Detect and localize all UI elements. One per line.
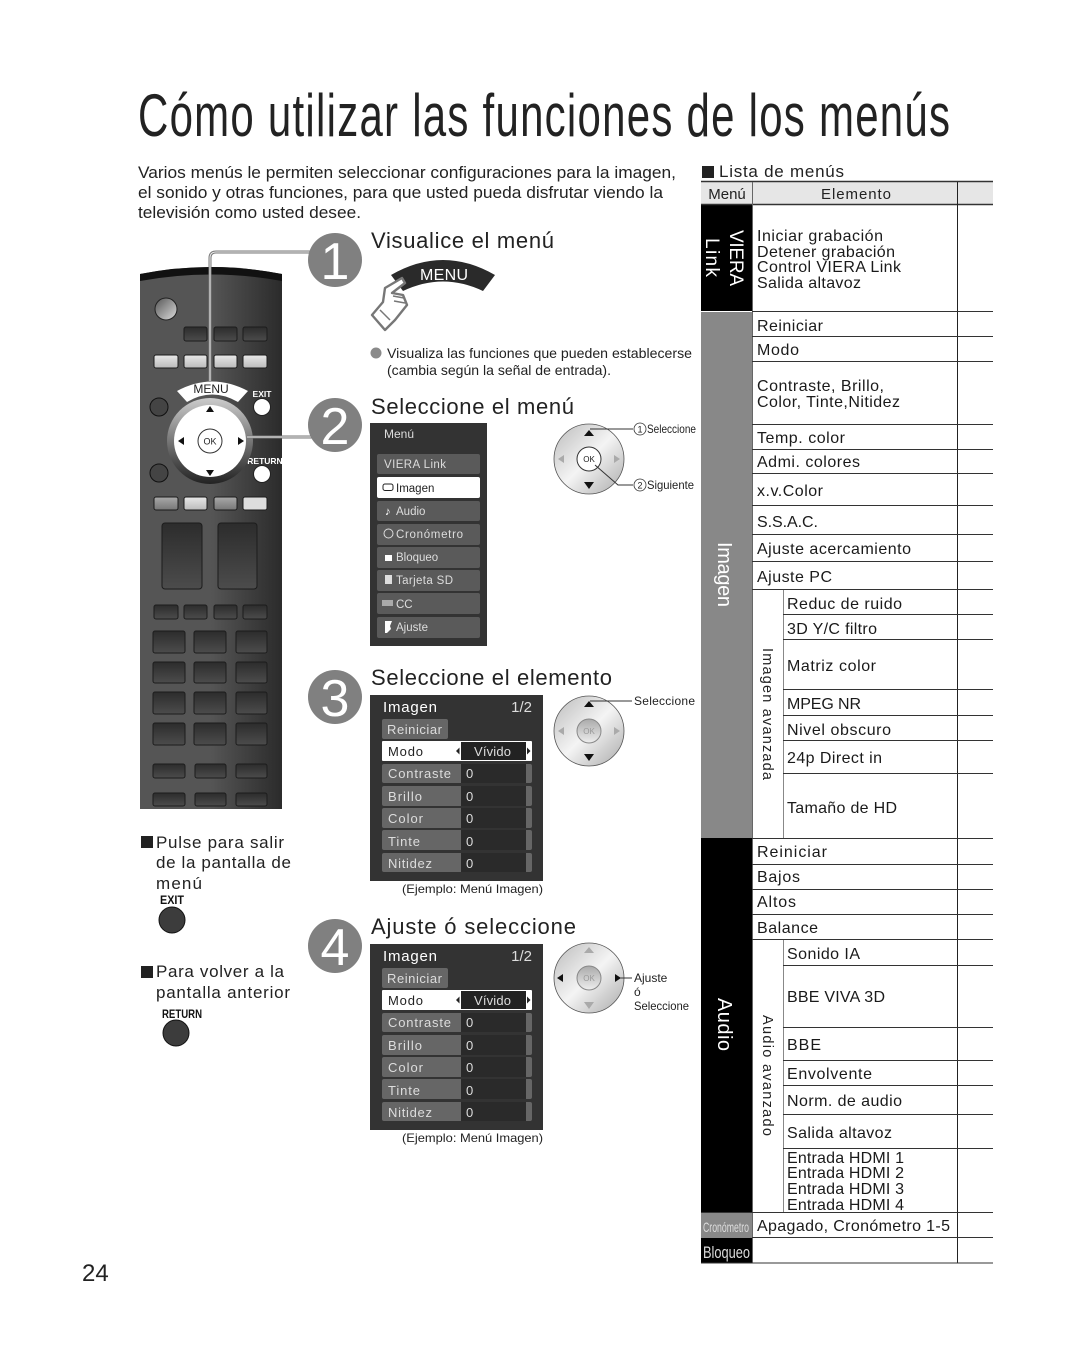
category: VIERA Link	[701, 230, 746, 286]
table items: Tamaño de HD	[787, 800, 897, 817]
table items: BBE	[787, 1037, 821, 1054]
dial step 3	[554, 694, 695, 766]
table items: Color, Tinte,Nitidez	[757, 394, 900, 411]
menu panel: Tarjeta SD	[396, 575, 453, 587]
image menu panel step 3: Brillo	[388, 789, 422, 804]
table items: Modo	[757, 342, 799, 359]
table items: Ajuste acercamiento	[757, 541, 911, 558]
image menu panel step 4: Modo	[388, 993, 423, 1008]
sub-category: Imagen avanzada: Imagen avanzada	[759, 648, 775, 781]
dial step 4: ó	[634, 985, 641, 999]
table items: Altos	[757, 894, 796, 911]
category: VIERA Link: VIERA	[725, 230, 746, 286]
table items: Contraste, Brillo,	[757, 378, 884, 395]
image menu panel step 4: Nitidez	[388, 1105, 432, 1120]
heading step 2: Seleccione el menú	[371, 394, 574, 419]
dial step 4: Ajuste	[634, 971, 668, 985]
image menu panel step 4: 0	[466, 1105, 473, 1120]
image menu panel step 4: Vívido	[474, 993, 511, 1008]
table heading: Lista de menús	[719, 162, 844, 181]
menu list table: Elemento	[821, 186, 891, 203]
menu panel: Bloqueo	[396, 552, 438, 564]
table items: Control VIERA Link	[757, 259, 902, 276]
image menu panel step 3	[370, 695, 543, 881]
image menu panel step 4: Imagen	[383, 948, 437, 965]
dial step 2: Seleccione	[647, 422, 696, 436]
step 1 note	[370, 345, 692, 378]
table items: Envolvente	[787, 1066, 872, 1083]
dial step 2: 2	[637, 480, 643, 490]
table items: Nivel obscuro	[787, 722, 891, 739]
intro text: el sonido y otras funciones, para que usted pueda disfrutar viendo la	[138, 184, 664, 202]
step 1 note: (cambia según la señal de entrada).	[387, 362, 611, 378]
table items: Entrada HDMI 4	[787, 1197, 904, 1214]
dial step 3: OK	[583, 727, 595, 736]
menu list table: Menú	[708, 186, 746, 203]
table items: Sonido IA	[787, 946, 860, 963]
image menu panel step 4: Reiniciar	[387, 971, 443, 986]
image menu panel step 3: 0	[466, 856, 473, 871]
intro text	[138, 164, 676, 222]
image menu panel step 4: Tinte	[388, 1083, 420, 1098]
category: Cronómetro: Cronómetro	[703, 1219, 749, 1235]
image menu panel step 3: 1/2	[511, 699, 532, 716]
table items: Norm. de audio	[787, 1093, 902, 1110]
table items: Matriz color	[787, 658, 877, 675]
remote control: OK	[203, 436, 217, 446]
intro text: Varios menús le permiten seleccionar configuraciones para la imagen,	[138, 164, 676, 182]
step number 1	[308, 233, 362, 291]
image menu panel step 3: 0	[466, 834, 473, 849]
image menu panel step 3: Vívido	[474, 744, 511, 759]
table items: Detener grabación	[757, 244, 895, 261]
return note	[141, 962, 290, 1046]
title: Cómo utilizar las funciones de los menús	[138, 82, 950, 149]
table items: Entrada HDMI 3	[787, 1181, 904, 1198]
table items: Iniciar grabación	[757, 228, 883, 245]
table items: Reiniciar	[757, 318, 824, 335]
table items: Balance	[757, 920, 818, 937]
remote control: RETURN	[247, 456, 283, 466]
heading step 1: Visualice el menú	[371, 228, 554, 253]
heading step 4: Ajuste ó seleccione	[371, 914, 576, 939]
menu panel	[370, 423, 487, 646]
step number 4	[308, 919, 362, 977]
menu panel: Menú	[384, 427, 414, 441]
menu panel: Cronómetro	[396, 529, 463, 541]
caption step 3: (Ejemplo: Menú Imagen)	[402, 882, 543, 896]
menu panel: Ajuste	[396, 622, 428, 634]
menu panel: VIERA Link	[384, 459, 446, 471]
exit note: Pulse para salir	[156, 833, 284, 852]
image menu panel step 4: Color	[388, 1060, 424, 1075]
menu button banner with hand	[372, 260, 495, 330]
category: VIERA Link: Link	[701, 238, 722, 278]
step number 3	[308, 670, 362, 728]
table items: BBE VIVA 3D	[787, 989, 885, 1006]
dial step 4: OK	[583, 974, 595, 983]
image menu panel step 3: Tinte	[388, 834, 420, 849]
table items: S.S.A.C.	[757, 514, 818, 531]
return note: RETURN	[162, 1007, 202, 1021]
table items: Bajos	[757, 869, 800, 886]
step number 3: 3	[321, 670, 349, 728]
table items: MPEG NR	[787, 696, 861, 713]
dial step 2: OK	[583, 455, 595, 464]
table items: Entrada HDMI 2	[787, 1165, 904, 1182]
dial step 4: Seleccione	[634, 999, 689, 1013]
image menu panel step 3: Imagen	[383, 699, 437, 716]
connector lines	[210, 252, 312, 437]
table items: Apagado, Cronómetro 1-5	[757, 1218, 950, 1235]
image menu panel step 4: Brillo	[388, 1038, 422, 1053]
page number: 24	[82, 1260, 109, 1287]
image menu panel step 3: Reiniciar	[387, 722, 443, 737]
table items: Admi. colores	[757, 454, 860, 471]
step number 2	[308, 398, 362, 456]
remote control	[140, 267, 283, 809]
step number 4: 4	[321, 919, 349, 977]
menu panel: CC	[396, 599, 413, 611]
image menu panel step 3: 0	[466, 811, 473, 826]
step number 2: 2	[321, 398, 349, 456]
exit note: menú	[156, 874, 202, 893]
table items: Ajuste PC	[757, 569, 832, 586]
table items: 3D Y/C filtro	[787, 621, 877, 638]
table items: Salida altavoz	[787, 1125, 892, 1142]
table items: Temp. color	[757, 430, 846, 447]
menu panel: Imagen	[396, 483, 434, 495]
step 1 note: Visualiza las funciones que pueden establecerse	[387, 345, 692, 361]
exit note: de la pantalla de	[156, 853, 291, 872]
image menu panel step 3: Modo	[388, 744, 423, 759]
remote control: EXIT	[253, 389, 272, 399]
step number 1: 1	[321, 233, 349, 291]
image menu panel step 4: Contraste	[388, 1015, 451, 1030]
heading step 3: Seleccione el elemento	[371, 665, 612, 690]
image menu panel step 3: 0	[466, 789, 473, 804]
table items: Entrada HDMI 1	[787, 1150, 904, 1167]
return note: Para volver a la	[156, 962, 285, 981]
exit note: EXIT	[160, 893, 185, 907]
image menu panel step 3: Contraste	[388, 766, 451, 781]
menu list table	[701, 162, 993, 1263]
image menu panel step 3: 0	[466, 766, 473, 781]
menu button banner with hand: MENU	[420, 267, 468, 284]
dial step 2	[554, 422, 696, 494]
image menu panel step 3: Nitidez	[388, 856, 432, 871]
intro text: televisión como usted desee.	[138, 204, 361, 222]
remote control: MENU	[193, 382, 229, 396]
table items: x.v.Color	[757, 483, 824, 500]
category: Audio: Audio	[713, 998, 735, 1051]
table items: 24p Direct in	[787, 750, 882, 767]
caption step 4: (Ejemplo: Menú Imagen)	[402, 1131, 543, 1145]
table items: Reduc de ruido	[787, 596, 902, 613]
table items: Reiniciar	[757, 844, 828, 861]
table items	[757, 228, 950, 1235]
category: Bloqueo: Bloqueo	[703, 1243, 750, 1262]
image menu panel step 4	[370, 944, 543, 1130]
menu panel: ♪	[385, 506, 391, 518]
dial step 2: 1	[637, 424, 643, 434]
sub-category: Audio avanzado: Audio avanzado	[759, 1015, 775, 1136]
image menu panel step 4: 0	[466, 1083, 473, 1098]
category: Imagen: Imagen	[713, 542, 735, 607]
image menu panel step 3: Color	[388, 811, 424, 826]
image menu panel step 4: 1/2	[511, 948, 532, 965]
table items: Salida altavoz	[757, 275, 861, 292]
return note: pantalla anterior	[156, 983, 290, 1002]
dial step 2: Siguiente	[647, 478, 694, 492]
image menu panel step 4: 0	[466, 1038, 473, 1053]
image menu panel step 4: 0	[466, 1015, 473, 1030]
exit note	[141, 833, 291, 933]
image menu panel step 4: 0	[466, 1060, 473, 1075]
dial step 4	[554, 943, 689, 1013]
dial step 3: Seleccione	[634, 694, 695, 708]
menu panel: Audio	[396, 506, 425, 518]
